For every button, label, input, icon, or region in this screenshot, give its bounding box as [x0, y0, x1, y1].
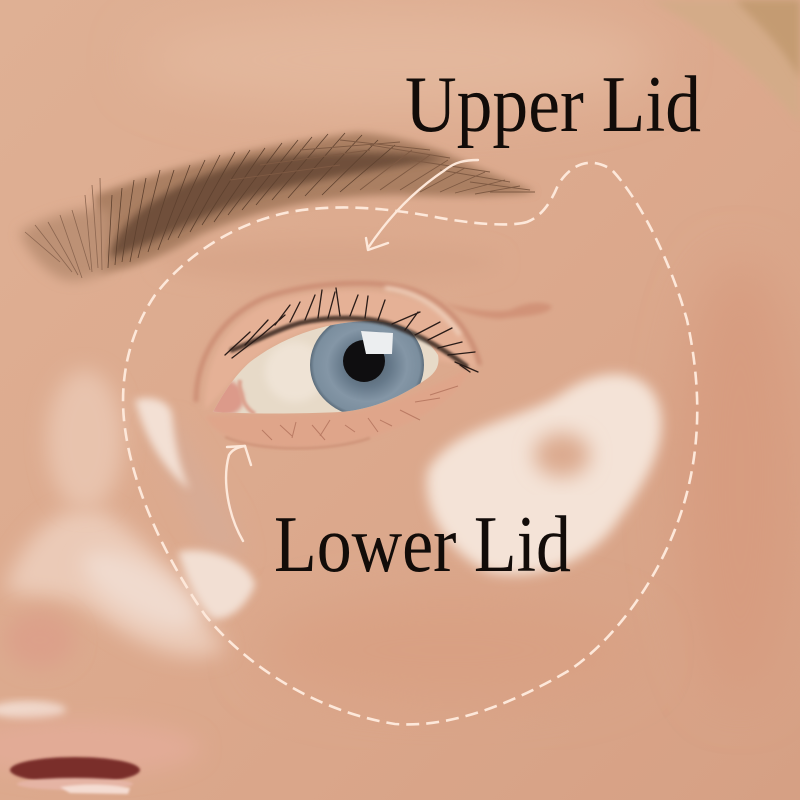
catchlight: [361, 331, 393, 354]
crease extension: [445, 303, 552, 319]
hair: [650, 0, 800, 125]
gloss band on side of nose: [5, 508, 225, 656]
nostril: [10, 757, 140, 783]
inner corner: [213, 380, 246, 413]
eyeball: [213, 321, 438, 414]
nose: [0, 370, 225, 794]
white patch: side of nose: [135, 398, 255, 619]
pupil: [343, 340, 385, 382]
upper lid crease: [196, 283, 480, 402]
lower lid: [205, 368, 470, 448]
arrow: to upper lid: [366, 160, 478, 250]
upper lid skin: [205, 291, 478, 410]
white patch: cheek: [427, 374, 661, 574]
upper lashes: [225, 288, 478, 372]
eyebrow hairs: [25, 178, 102, 278]
dashed under-eye patch outline: [123, 163, 697, 724]
eyebrow: [20, 133, 535, 280]
lower lashes: [262, 386, 458, 440]
eyelid folds: [196, 283, 552, 448]
eye socket shading: [150, 242, 500, 560]
label: Upper Lid: Upper Lid: [405, 61, 701, 149]
eyebrow soft base: [95, 133, 535, 272]
iris: [310, 321, 424, 412]
label: Lower Lid: Lower Lid: [274, 501, 571, 589]
arrow: to lower lid: [226, 446, 251, 541]
